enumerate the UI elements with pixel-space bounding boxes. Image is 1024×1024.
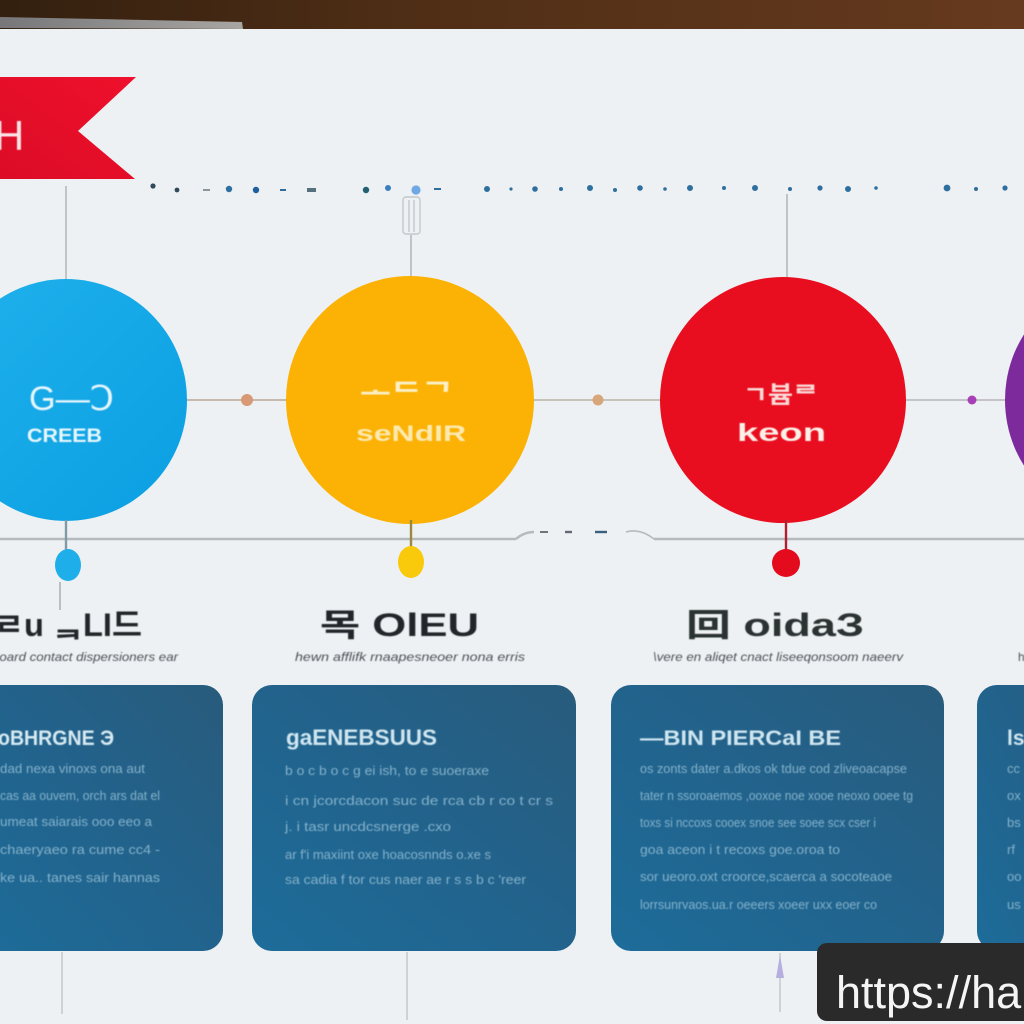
panel 3 body text: goa aceon i t recoxs goe.oroa to xyxy=(640,842,840,857)
panel 1 body text xyxy=(0,761,161,885)
panel: step 1 details xyxy=(0,685,223,951)
panel 3 body text: tater n ssoroaemos ,ooxoe noe xooe neoxo ooee tg xyxy=(640,788,913,803)
panel 1 body text: chaeryaeo ra cume cc4 - xyxy=(0,842,160,857)
panel 1 body text: dad nexa vinoxs ona aut xyxy=(0,761,145,776)
step 2 circle heading: ᅩᄃᄀ xyxy=(360,379,453,409)
pin connectors xyxy=(60,520,786,610)
panel 1 body text: ke ua.. tanes sair hannas xyxy=(0,870,161,885)
step 3 circle label: keon xyxy=(737,419,826,447)
panel 3 body text: lorrsunrvaos.ua.r oeeers xoeer uxx eoer co xyxy=(640,897,877,912)
step 2 subtitle: hewn afflifk rnaapesneoer nona erris xyxy=(295,650,525,664)
arrow stubs below panels xyxy=(62,952,784,1020)
panel 2 body text: b o c b o c g ei ish, to e suoeraxe xyxy=(285,763,489,778)
panel 4 body text: cc xyxy=(1007,761,1020,776)
step 4: purple circle xyxy=(1005,277,1024,523)
pin: yellow xyxy=(398,546,424,578)
panel 4 body text: bs xyxy=(1007,815,1021,830)
step 3 heading: 回 oidaЗ xyxy=(686,607,864,643)
panel 3 body text: toxs si nccoxs cooex snoe see soee scx cser i xyxy=(640,815,876,830)
panel: step 2 details xyxy=(252,685,576,951)
step 2 heading: 목 OlEU xyxy=(320,607,479,643)
panel 3 body text: sor ueoro.oxt croorce,scaerca a socoteaoe xyxy=(640,869,892,884)
horizontal connectors between circles xyxy=(186,394,1006,406)
step 1 circle label: CREEB xyxy=(27,426,102,447)
dotted timeline xyxy=(150,183,1008,195)
step 1: blue circle xyxy=(0,279,187,521)
step 2 circle label: seNdIR xyxy=(356,421,466,446)
step 3: red circle xyxy=(660,277,906,523)
step 3 circle heading: ㄱ븀ᄅ xyxy=(743,382,818,409)
panel 1 body text: umeat saiarais ooo eeo a xyxy=(0,814,153,829)
vertical connectors from timeline to circles xyxy=(66,186,787,280)
panel: step 3 details xyxy=(611,685,944,951)
panel 4 body text: oo xyxy=(1007,869,1021,884)
pin: red xyxy=(772,549,800,577)
title ribbon xyxy=(0,77,136,179)
panel 4 body text: rf xyxy=(1007,842,1015,857)
icon: paper clip xyxy=(403,197,420,234)
panel 4 body text xyxy=(1007,761,1021,912)
pin: blue xyxy=(55,549,81,581)
panel 3 body text xyxy=(640,761,913,912)
panel 1 body text: cas aa ouvem, orch ars dat el xyxy=(0,788,160,803)
panel 2 heading: gaENEBSUUS xyxy=(286,725,437,750)
step 1 circle heading: G—Ↄ xyxy=(29,380,114,418)
panel 4 body text: ox xyxy=(1007,788,1021,803)
panel 2 body text: i cn jcorcdacon suc de rca cb r co t cr s xyxy=(285,793,554,808)
panel 2 body text xyxy=(284,763,554,887)
watermark URL: https://ha xyxy=(836,967,1022,1018)
step 3 subtitle: \vere en aliqet cnact liseeqonsoom naeerv xyxy=(653,650,904,664)
watermark xyxy=(817,943,1024,1021)
panel 3 body text: os zonts dater a.dkos ok tdue cod zliveoacapse xyxy=(640,761,907,776)
panel 2 body text: sa cadia f tor cus naer ae r s s b c 'reer xyxy=(285,872,527,887)
background: wooden table edge xyxy=(0,0,1024,29)
long horizontal rule with dashed break xyxy=(0,531,1024,539)
panel: step 4 details xyxy=(977,685,1024,951)
panel 2 body text: j. i tasr uncdcsnerge .cxo xyxy=(284,819,451,834)
panel 3 heading: —BIN PIERCaI BE xyxy=(640,727,841,750)
grey paper strip behind the sheet xyxy=(0,17,243,29)
panel 4 body text: us xyxy=(1007,897,1021,912)
panel 1 heading: oBHRGNE Э xyxy=(0,727,114,750)
panel 4 heading: ls xyxy=(1007,727,1024,750)
step 2: yellow circle xyxy=(286,276,534,524)
panel 2 body text: ar f'i maxiint oxe hoacosnnds o.xe s xyxy=(285,847,492,862)
